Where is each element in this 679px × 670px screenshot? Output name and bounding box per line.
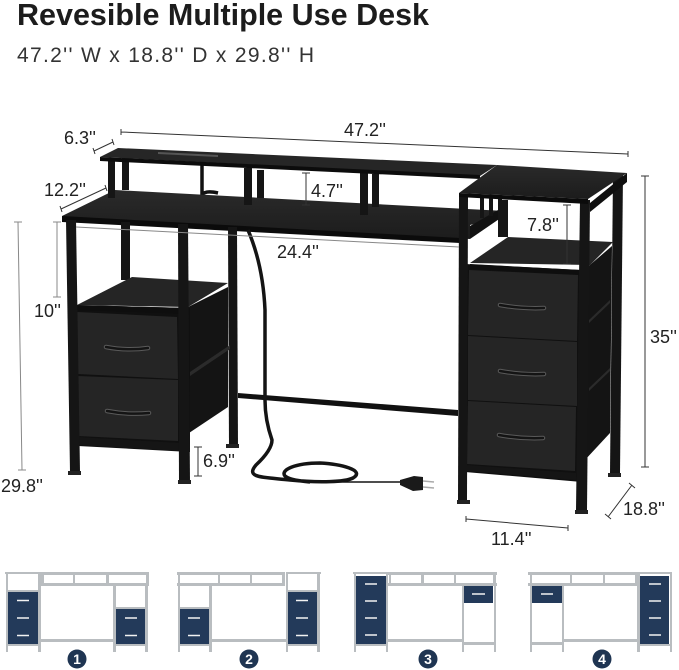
dimension: shelf height 7.8: 7.8'' (527, 215, 559, 235)
left tower (66, 220, 239, 484)
dimension: tower height 35: 35'' (650, 327, 677, 347)
right drawers (467, 270, 578, 471)
dimension: desk depth 12.2: 12.2'' (44, 180, 86, 200)
configuration 1 diagram (5, 572, 149, 652)
dimension: riser depth 6.3 (64, 128, 114, 154)
dimension: width 47.2 (121, 120, 628, 157)
left drawers (77, 312, 178, 441)
badge 4 (592, 650, 612, 668)
badge 1: 1 (73, 651, 81, 667)
dimension: 10 inch (34, 222, 61, 321)
subtitle: overall dimensions: 47.2'' W x 18.8'' D x 29.8'' H (17, 44, 314, 67)
badge 3 (418, 650, 438, 668)
monitor riser (100, 148, 497, 215)
dimension: clearance 6.9: 6.9'' (203, 451, 235, 471)
dimension: tower height 35 (641, 176, 677, 467)
dimension: knee width 24.4 (76, 227, 459, 262)
badge 2: 2 (245, 651, 253, 667)
badge 4: 4 (598, 651, 606, 667)
dimension: width 47.2: 47.2'' (344, 120, 386, 140)
dimension: 10 inch: 10'' (34, 301, 61, 321)
cable behind monitor riser (202, 165, 218, 195)
dimension: drawer width 11.4 (466, 516, 568, 549)
dimension: drawer width 11.4: 11.4'' (491, 529, 532, 549)
dimension: shelf height 7.8 (527, 205, 571, 264)
configuration 3 diagram (353, 572, 497, 652)
configuration 4 diagram (528, 572, 672, 652)
right tower (457, 165, 627, 514)
dimension: riser height 4.7: 4.7'' (311, 181, 343, 201)
dimension: riser depth 6.3: 6.3'' (64, 128, 96, 148)
stretcher bar (238, 393, 458, 416)
dimension: tower depth 18.8 (605, 483, 665, 519)
badge 3: 3 (424, 651, 432, 667)
dimension: desk depth 12.2 (44, 180, 107, 212)
configuration 2 diagram (177, 572, 321, 652)
badge 1 (68, 650, 86, 668)
dimension: tower depth 18.8: 18.8'' (623, 499, 665, 519)
dimension: knee width 24.4: 24.4'' (277, 242, 319, 262)
desk illustration (62, 148, 627, 514)
dimension: clearance 6.9 (194, 447, 235, 476)
dimension: height 29.8: 29.8'' (1, 476, 43, 496)
main desktop (62, 190, 505, 243)
dimension: riser height 4.7 (302, 173, 343, 205)
dimension: height 29.8 (1, 222, 43, 496)
power cable and plug (248, 230, 434, 491)
badge 2 (240, 650, 258, 668)
